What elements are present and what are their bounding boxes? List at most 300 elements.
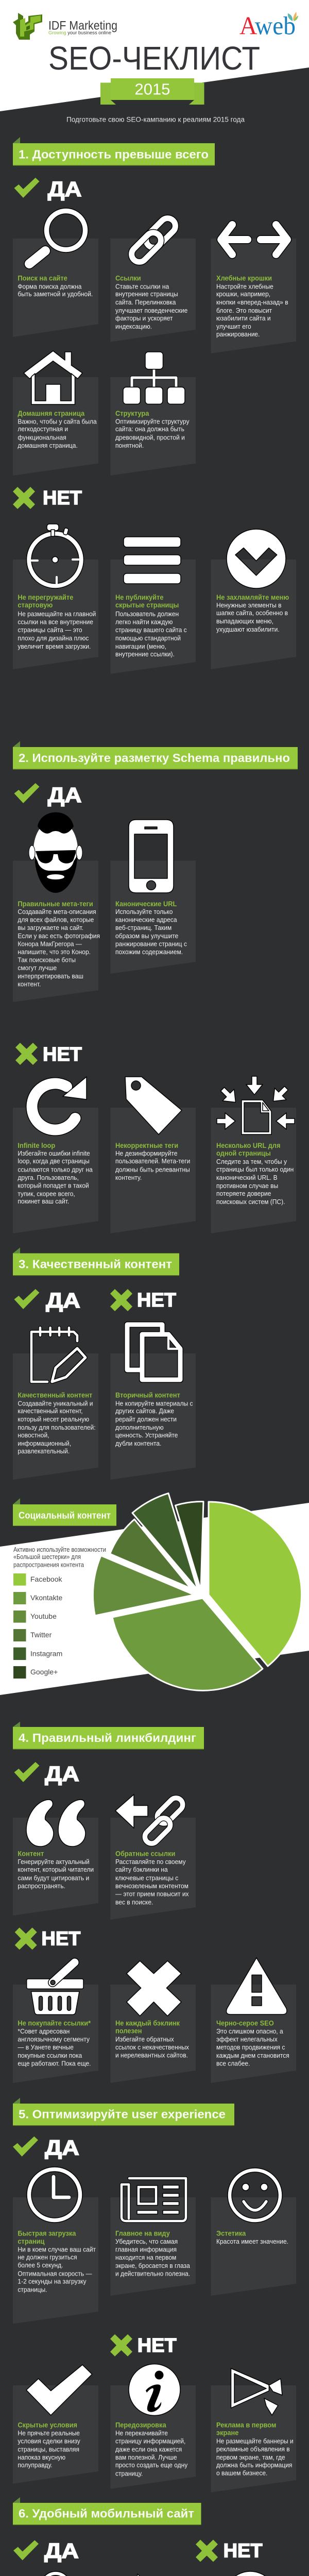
text: infinite loop: ссылаются только друг на: [18, 1166, 93, 1174]
text: quality content: новостной,: [18, 1432, 49, 1439]
text: overloaded start page: [18, 594, 96, 650]
text: quality content: [18, 1391, 96, 1455]
text: meta tags: смогут лучше: [18, 964, 57, 972]
text: ads above the fold: должна быть информация: [216, 2462, 292, 2469]
text: not every backlink: и нерелевантных сайтов.: [115, 2052, 188, 2059]
text: main in view: находится на первом: [115, 2254, 176, 2261]
text: canonical URL: ранжирование страниц с: [115, 940, 187, 948]
subtitle: Подготовьте свою SEO-кампанию к реалиям 2015 года: [66, 116, 245, 124]
text: do not buy links: англоязычному сегменту: [18, 2036, 90, 2043]
panel: hidden pages: [110, 537, 196, 674]
panel: not every backlink: [110, 1961, 196, 2083]
marker: yes: [14, 1762, 79, 1786]
panel: content: [13, 1800, 98, 1916]
text: breadcrumbs: Настройте хлебные: [216, 283, 273, 291]
text: overloaded start page: плохо для дизайна плюс: [18, 635, 89, 642]
text: several URLs: [216, 1142, 294, 1206]
text: quality content: качественный контент,: [18, 1408, 83, 1415]
panel: overloaded start page: [13, 524, 98, 669]
icon: cross: [127, 1961, 181, 2016]
icon: two documents: [127, 1325, 180, 1380]
icon: magnifier: [29, 208, 88, 264]
text: hidden terms: полуправду.: [18, 2462, 53, 2469]
ribbon: year 2015: 2015: [135, 80, 170, 98]
text: several URLs: страницы был только один: [216, 1166, 294, 1173]
text: fast loading: страницы.: [18, 2286, 47, 2294]
text: cluttered menu: ухудшают юзабилити.: [216, 626, 280, 633]
icon: chain: [128, 215, 179, 265]
panel: infinite loop: [13, 1077, 98, 1233]
text: wrong tags: должны быть релевантны: [115, 1166, 190, 1174]
text: meta tags: [18, 900, 100, 988]
text: backlinks: сайту бэклинки на: [115, 1866, 168, 1873]
icon: smiley: [228, 2168, 282, 2223]
panel: aesthetics: [211, 2168, 296, 2296]
text: meta tags: вы загружаете на сайт.: [18, 924, 83, 931]
text: content: сами будут цитировать и: [18, 1874, 89, 1882]
text: quality content: Качественный контент: [18, 1391, 93, 1399]
title: SEO-ЧЕКЛИСТ: [48, 40, 260, 77]
marker: no: [110, 2334, 177, 2357]
text: not every backlink: [115, 2019, 190, 2059]
section 3 heading: 3. Качественный контент: [19, 1257, 172, 1270]
text: structure: понятной.: [115, 442, 144, 449]
text: structure: Оптимизируйте структуру: [115, 418, 190, 426]
text: cluttered menu: шапке сайта, особенно в: [216, 609, 288, 617]
text: duplicate content: рерайт должен нести: [115, 1416, 177, 1423]
icon: list bars: [124, 537, 181, 584]
text: duplicate content: дополнительную: [115, 1424, 164, 1431]
text: several URLs: потеряете доверие: [216, 1190, 271, 1197]
text: infinite loop: покинет ваш сайт.: [18, 1198, 69, 1205]
panel: several URLs: [211, 1076, 296, 1233]
marker: yes: ДА: [48, 783, 82, 807]
text: do not buy links: *Совет адресован: [18, 2028, 70, 2035]
text: backlinks: вес в поиске.: [115, 1899, 153, 1906]
icon: megaphone: [231, 2368, 282, 2415]
marker: no: НЕТ: [43, 1044, 82, 1065]
text: canonical URL: [115, 900, 187, 956]
section 2 heading: 2. Используйте разметку Schema правильно: [19, 751, 290, 765]
icon: document with arrows: [217, 1076, 295, 1134]
text: aesthetics: [216, 2229, 288, 2245]
text: fast loading: Оптимальная скорость —: [18, 2270, 92, 2278]
text: infinite loop: loop, когда две страницы: [18, 1158, 90, 1165]
text: fast loading: [18, 2229, 96, 2294]
text: ads above the fold: экране: [216, 2429, 238, 2437]
panel: hidden terms: [13, 2365, 98, 2484]
icon: bearded man: [29, 812, 82, 893]
icon: arrows: [221, 225, 287, 255]
logo: IDF Marketing: Growing your business online: [48, 30, 111, 36]
text: ads above the fold: Реклама в первом: [216, 2421, 276, 2429]
social heading: [13, 1498, 116, 1526]
panel: backlinks: [110, 1794, 196, 1920]
text: links: внутренние страницы: [115, 291, 178, 298]
text: infinite loop: друга. Пользователь,: [18, 1174, 79, 1181]
text: social intro: распространения контента: [13, 1561, 84, 1568]
text: overloaded start page: стартовую: [18, 601, 53, 609]
text: ads above the fold: первом экране, там, где: [216, 2454, 285, 2461]
marker: no: НЕТ: [137, 1290, 176, 1311]
panel: quality content: [13, 1328, 98, 1480]
text: grey SEO: эффект нелегальных: [216, 2036, 278, 2043]
text: overdose: даже если она кажется: [115, 2446, 182, 2453]
text: cluttered menu: Не захламляйте меню: [216, 594, 289, 601]
marker: no: [196, 2540, 263, 2562]
panel: functional links: [110, 2574, 196, 2576]
text: overloaded start page: Не перегружайте: [18, 594, 73, 601]
text: home page: домашняя страница.: [18, 442, 78, 449]
text: content: Генерируйте актуальный: [18, 1858, 90, 1866]
text: several URLs: противном случае вы: [216, 1182, 278, 1190]
text: canonical URL: Используйте только: [115, 908, 173, 916]
legend: social networks: Vkontakte: [30, 1594, 62, 1602]
text: breadcrumbs: [216, 274, 288, 338]
text: content: [18, 1850, 94, 1890]
text: meta tags: контент.: [18, 980, 41, 988]
text: backlinks: вечнозеленым контентом: [115, 1883, 188, 1890]
text: fast loading: Быстрая загрузка: [18, 2229, 76, 2238]
text: hidden pages: навигации (меню,: [115, 643, 166, 650]
icon: notepad: [31, 1328, 85, 1382]
text: links: улучшает поведенческие: [115, 307, 187, 314]
marker: no: НЕТ: [41, 1928, 80, 1950]
text: quality content: который несет реальную: [18, 1416, 89, 1423]
text: meta tags: Конора МакГрегора —: [18, 940, 82, 948]
icon: check mark: [26, 2365, 92, 2415]
legend: social networks: Google+: [30, 1668, 58, 1676]
panel: do not buy links: [13, 1962, 98, 2083]
ribbon: year 2015: [100, 78, 204, 105]
panel: links: [110, 215, 196, 342]
text: links: сайта. Перелинковка: [115, 299, 176, 306]
text: structure: [115, 410, 190, 449]
text: not every backlink: ссылок с некачественных: [115, 2044, 190, 2051]
text: home page: функциональная: [18, 434, 66, 442]
text: breadcrumbs: юзабилити сайта и: [216, 315, 271, 322]
text: meta tags: Если у вас есть фотография: [18, 933, 100, 940]
icon: basket: [27, 1962, 83, 2014]
text: grey SEO: методов продвижения с: [216, 2044, 285, 2051]
icon: loop arrow: [32, 1077, 87, 1130]
text: overdose: Не перекачивайте: [115, 2430, 168, 2437]
panel: responsive design: [13, 2571, 98, 2576]
marker: no: [15, 1927, 80, 1950]
text: infinite loop: Избегайте ошибки infinite: [18, 1150, 90, 1157]
text: canonical URL: образом вы улучшите: [115, 933, 178, 940]
marker: yes: ДА: [48, 177, 82, 201]
panel: meta tags: [13, 812, 100, 1002]
text: canonical URL: Канонические URL: [115, 900, 177, 908]
text: content: контент, который читатели: [18, 1866, 94, 1873]
section 5 heading: [13, 2098, 234, 2126]
icon: newspaper: [122, 2178, 186, 2221]
text: breadcrumbs: блоге. Это повысит: [216, 307, 272, 314]
text: meta tags: напишите, что это Конор.: [18, 948, 91, 956]
legend: social networks: Youtube: [30, 1612, 57, 1620]
text: several URLs: Следите за тем, чтобы у: [216, 1158, 287, 1165]
text: home page: Домашняя страница: [18, 410, 85, 417]
text: links: Ставьте ссылки на: [115, 283, 169, 291]
text: backlinks: [115, 1850, 189, 1906]
text: links: Ссылки: [115, 274, 141, 282]
text: meta tags: Правильные мета-теги: [18, 900, 93, 908]
text: main in view: главная информация: [115, 2246, 177, 2253]
text: social intro: «Большой шестерки» для: [13, 1553, 81, 1561]
text: infinite loop: тупик, скорее всего,: [18, 1190, 75, 1198]
text: do not buy links: покупные ссылки пока: [18, 2052, 82, 2059]
icon: phone: [129, 820, 174, 893]
text: aesthetics: Красота имеет значение.: [216, 2238, 288, 2245]
text: backlinks: — этот прием повысит их: [115, 1890, 189, 1898]
text: main in view: и действительно полезна.: [115, 2270, 190, 2278]
text: overdose: страницу.: [115, 2470, 143, 2478]
section 1 heading: 1. Доступность превыше всего: [19, 148, 209, 161]
text: wrong tags: Не дезинформируйте: [115, 1150, 178, 1157]
background: white social band: [0, 1503, 309, 1695]
text: hidden pages: [115, 594, 187, 658]
icon: quotes: [26, 1800, 85, 1846]
text: duplicate content: Не копируйте материалы с: [115, 1400, 193, 1408]
text: duplicate content: [115, 1391, 193, 1447]
text: aesthetics: Эстетика: [216, 2229, 246, 2238]
text: duplicate content: дубли контента.: [115, 1440, 161, 1447]
section 4 heading: [13, 1722, 204, 1750]
text: wrong tags: контенту.: [115, 1174, 142, 1181]
text: canonical URL: веб-страниц. Таким: [115, 924, 171, 931]
panel: canonical URL: [110, 820, 196, 974]
marker: yes: [13, 2539, 79, 2563]
text: overdose: просто создать еще одну: [115, 2462, 188, 2469]
text: meta tags: Создавайте мета-описания: [18, 908, 96, 916]
text: hidden terms: напоказ вкусную: [18, 2454, 65, 2461]
section 4 heading: 4. Правильный линкбилдинг: [19, 1731, 196, 1744]
text: backlinks: Расставляйте по своему: [115, 1858, 186, 1866]
text: home page: легкодоступная и: [18, 426, 68, 433]
text: breadcrumbs: ранжирование.: [216, 331, 260, 338]
legend: social networks: Facebook: [30, 1575, 62, 1583]
text: meta tags: для всех файлов, которые: [18, 916, 94, 924]
panel: structure: [110, 352, 196, 476]
text: canonical URL: похожим содержанием.: [115, 948, 183, 956]
marker: yes: [14, 1289, 80, 1312]
icon: cursor: [138, 2574, 170, 2576]
pie chart: social networks: [93, 1493, 302, 1690]
text: quality content: пользу для пользователей:: [18, 1424, 96, 1431]
text: cluttered menu: выпадающих меню,: [216, 618, 273, 625]
text: canonical URL: канонические адреса: [115, 916, 177, 924]
text: main in view: экране, бросается в глаза: [115, 2262, 190, 2269]
panel: ads above the fold: [211, 2368, 296, 2493]
icon: tag: [125, 1077, 182, 1134]
text: wrong tags: пользователей. Мета-теги: [115, 1158, 190, 1165]
text: main in view: Убедитесь, что самая: [115, 2238, 178, 2245]
text: ads above the fold: [216, 2421, 294, 2477]
panel: grey SEO: [211, 1958, 296, 2083]
panel: fast loading: [13, 2167, 98, 2324]
text: do not buy links: еще работают. Пока еще.: [18, 2060, 91, 2067]
logo: IDF Marketing: [13, 13, 117, 40]
text: hidden pages: легко найти каждую: [115, 618, 173, 626]
text: breadcrumbs: Хлебные крошки: [216, 274, 272, 282]
text: ads above the fold: рекламные объявления в: [216, 2446, 290, 2453]
text: main in view: [115, 2229, 190, 2278]
icon: circle chevron: [227, 529, 286, 588]
marker: no: НЕТ: [138, 2335, 177, 2357]
text: infinite loop: [18, 1142, 93, 1205]
icon: clock: [27, 2167, 82, 2223]
marker: yes: ДА: [44, 2539, 79, 2563]
text: structure: древовидной, простой и: [115, 434, 185, 442]
text: hidden pages: внутренние ссылки).: [115, 651, 175, 658]
logo: IDF Marketing: IDF Marketing: [48, 19, 117, 33]
section 3 heading: [13, 1248, 179, 1276]
text: hidden pages: помощью стандартной: [115, 635, 181, 642]
section 2 heading: [13, 741, 298, 770]
text: hidden terms: условия сделки внизу: [18, 2437, 81, 2445]
text: hidden pages: Пользователь должен: [115, 611, 179, 618]
text: ads above the fold: Не размещайте баннеры и: [216, 2437, 294, 2445]
text: grey SEO: все слабее.: [216, 2060, 250, 2067]
text: social intro: Активно используйте возможности: [13, 1546, 106, 1553]
text: breadcrumbs: крошки, например,: [216, 291, 270, 298]
marker: no: НЕТ: [224, 2540, 263, 2562]
marker: no: [15, 1043, 82, 1065]
text: do not buy links: [18, 2019, 91, 2067]
panel: home page: [13, 351, 98, 476]
text: quality content: Создавайте уникальный и: [18, 1400, 93, 1408]
text: overdose: Передозировка: [115, 2421, 166, 2429]
text: duplicate content: других сайтов. Даже: [115, 1408, 174, 1415]
text: several URLs: канонический URL. В: [216, 1174, 278, 1181]
text: overloaded start page: ссылки на все внутренние: [18, 618, 93, 626]
text: several URLs: одной страницы: [216, 1149, 271, 1157]
text: content: Контент: [18, 1850, 44, 1858]
section 1 heading: [13, 137, 215, 166]
section 6 heading: 6. Удобный мобильный сайт: [19, 2507, 194, 2520]
icon: arrow with chain: [115, 1794, 185, 1846]
text: overdose: вам полезной. Лучше: [115, 2454, 177, 2461]
background: white header wedge: [0, 0, 309, 111]
panel: duplicate content: [110, 1325, 196, 1480]
text: fast loading: Ни в коем случае ваш сайт: [18, 2246, 96, 2253]
text: not every backlink: Избегайте обратных: [115, 2036, 175, 2043]
text: grey SEO: [216, 2019, 289, 2067]
legend: social networks: [13, 1573, 62, 1679]
text: infinite loop: который попадет в такой: [18, 1182, 89, 1190]
text: structure: сайта: она должна быть: [115, 426, 184, 433]
marker: no: [13, 487, 82, 509]
text: several URLs: поисковых систем (ПС).: [216, 1198, 285, 1206]
text: home page: Важно, чтобы у сайта была: [18, 418, 97, 426]
text: infinite loop: Infinite loop: [18, 1142, 55, 1149]
text: wrong tags: [115, 1142, 190, 1181]
marker: yes: ДА: [45, 2136, 79, 2160]
icon: flash logo: [225, 2571, 276, 2576]
marker: yes: ДА: [46, 1289, 80, 1312]
text: meta tags: Так поисковые боты: [18, 956, 76, 964]
logo: Aweb: Aweb: [239, 11, 296, 40]
text: hidden terms: страницы, выставляя: [18, 2446, 79, 2453]
panel: site search: [13, 208, 98, 337]
text: grey SEO: Черно-серое SEO: [216, 2019, 274, 2027]
text: cluttered menu: Ненужные элементы в: [216, 602, 282, 609]
text: overloaded start page: Не размещайте на главной: [18, 611, 96, 618]
legend: social networks: Twitter: [30, 1631, 52, 1639]
text: wrong tags: Некорректные теги: [115, 1142, 178, 1149]
text: breadcrumbs: кнопки «вперед-назад» в: [216, 299, 288, 306]
text: links: индексацию.: [115, 323, 152, 330]
marker: no: НЕТ: [43, 487, 82, 509]
text: breadcrumbs: улучшит его: [216, 323, 251, 330]
section 5 heading: 5. Оптимизируйте user experience: [19, 2107, 226, 2121]
text: grey SEO: Это слишком опасно, а: [216, 2028, 283, 2035]
text: do not buy links: Не покупайте ссылки*: [18, 2019, 91, 2027]
text: grey SEO: каждым днем становится: [216, 2052, 289, 2059]
text: fast loading: более 5 секунд.: [18, 2262, 63, 2269]
text: structure: Структура: [115, 410, 149, 417]
marker: yes: ДА: [45, 1762, 79, 1786]
text: hidden terms: Не прячьте реальные: [18, 2430, 80, 2437]
panel: flash: [211, 2571, 296, 2576]
icon: info: [129, 2364, 180, 2415]
marker: yes: [14, 177, 82, 201]
text: quality content: развлекательный.: [18, 1448, 70, 1455]
text: fast loading: страниц: [18, 2238, 45, 2245]
panel: main in view: [110, 2178, 196, 2296]
text: overloaded start page: страницы сайта — это: [18, 626, 82, 634]
text: content: распространять.: [18, 1883, 65, 1890]
panel: cluttered menu: [211, 529, 296, 669]
section 6 heading: [13, 2497, 201, 2525]
panel: breadcrumbs: [211, 225, 296, 353]
text: hidden pages: скрытые страницы: [115, 601, 179, 609]
text: overdose: [115, 2421, 188, 2478]
legend: social networks: Instagram: [30, 1650, 62, 1658]
text: social intro: [13, 1546, 106, 1568]
text: overdose: страницу информацией,: [115, 2437, 185, 2445]
text: backlinks: ключевые страницы с: [115, 1874, 178, 1882]
text: fast loading: не должен грузиться: [18, 2253, 77, 2261]
text: cluttered menu: [216, 594, 289, 633]
text: links: [115, 274, 187, 330]
text: site search: [18, 274, 93, 298]
text: meta tags: интерпретировать ваш: [18, 973, 83, 980]
text: hidden terms: Скрытые условия: [18, 2421, 77, 2429]
text: hidden pages: Не публикуйте: [115, 594, 163, 601]
icon: tree: [123, 352, 185, 404]
text: fast loading: 1-2 секунды на загрузку: [18, 2278, 87, 2285]
marker: yes: [14, 783, 82, 807]
marker: no: [110, 1289, 176, 1311]
text: duplicate content: Вторичный контент: [115, 1391, 180, 1399]
icon: stopwatch: [27, 524, 83, 588]
text: main in view: Главное на виду: [115, 2229, 170, 2238]
text: ads above the fold: о вашем бизнесе.: [216, 2469, 267, 2477]
text: duplicate content: ценность. Устраняйте: [115, 1432, 178, 1439]
text: quality content: информационный,: [18, 1440, 71, 1447]
text: links: факторы и ускоряет: [115, 315, 173, 322]
text: not every backlink: полезен: [115, 2027, 142, 2035]
text: site search: Форма поиска должна: [18, 283, 82, 291]
text: not every backlink: Не каждый бэклинк: [115, 2019, 180, 2027]
text: home page: [18, 410, 97, 449]
text: do not buy links: — в Уанете вечные: [18, 2044, 74, 2051]
panel: overdose: [110, 2364, 196, 2489]
text: site search: Поиск на сайте: [18, 274, 67, 282]
panel: wrong tags: [110, 1077, 196, 1233]
